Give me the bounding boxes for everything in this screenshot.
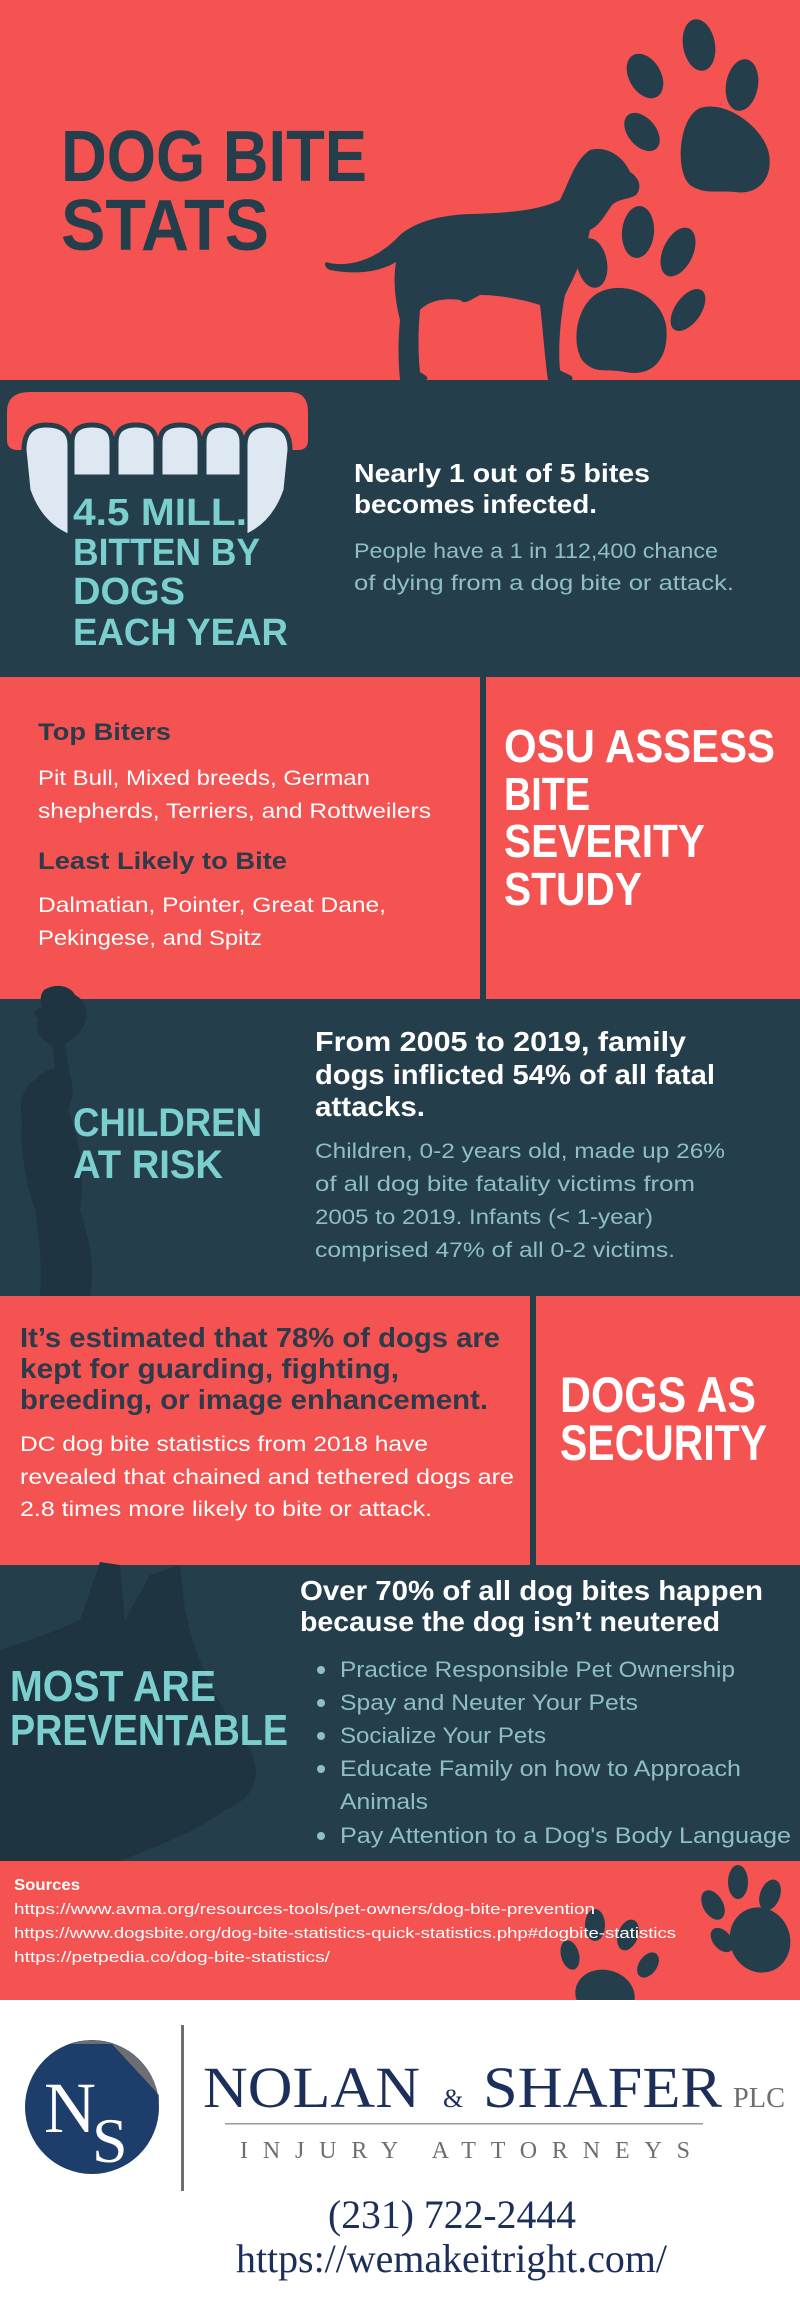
panel: children at risk	[0, 986, 800, 1296]
list: prevention tips: Socialize Your Pets	[340, 1723, 546, 1748]
list: prevention tips: Educate Family on how to Approach	[340, 1756, 741, 1781]
text: least likely: Pekingese, and Spitz	[38, 927, 262, 950]
text: sources: https://petpedia.co/dog-bite-statistics/	[14, 1949, 331, 1966]
list: prevention tips: Pay Attention to a Dog's Body Language	[340, 1823, 791, 1848]
icon: teeth	[7, 392, 308, 537]
text: guarding stat: 2.8 times more likely to bite or attack.	[20, 1498, 432, 1521]
text: firm name	[203, 2055, 785, 2120]
panel: dogs as security	[0, 1296, 800, 1565]
icon: dog silhouette	[325, 149, 639, 380]
text: infection stat: Nearly 1 out of 5 bites	[354, 458, 650, 488]
title: DOG BITE	[61, 117, 367, 197]
heading: OSU study: BITE	[504, 768, 590, 820]
text: infection stat: People have a 1 in 112,400 chance	[354, 540, 718, 563]
panel: most are preventable	[0, 1562, 800, 1861]
footer: contact	[236, 2192, 668, 2281]
text: sources: https://www.dogsbite.org/dog-bite-statistics-quick-statistics.php#dogbite-statistics	[14, 1925, 676, 1942]
text: top biters	[38, 719, 431, 823]
text: family dogs stat: dogs inflicted 54% of all fatal	[315, 1059, 715, 1090]
footer: contact: https://wemakeitright.com/	[236, 2236, 668, 2281]
text: family dogs stat: comprised 47% of all 0-2 victims.	[315, 1239, 675, 1262]
icon: NS logo: N	[44, 2068, 96, 2148]
text: neutered stat: because the dog isn’t neutered	[300, 1606, 720, 1637]
headline: 4.5 mill: BITTEN BY	[73, 532, 260, 574]
text: top biters: shepherds, Terriers, and Rottweilers	[38, 800, 431, 823]
text: firm name: PLC	[733, 2083, 785, 2114]
headline: 4.5 mill: DOGS	[73, 571, 185, 613]
text: family dogs stat: Children, 0-2 years old, made up 26%	[315, 1140, 725, 1163]
icon: paw bottom	[573, 205, 712, 373]
icon: paw top	[617, 17, 770, 192]
heading: most are preventable: PREVENTABLE	[10, 1706, 288, 1755]
text: top biters: Top Biters	[38, 719, 171, 746]
icon: NS logo: S	[92, 2105, 128, 2176]
headline: 4.5 mill	[73, 492, 288, 654]
text: firm name: SHAFER	[483, 2055, 722, 2120]
text: neutered stat	[300, 1575, 763, 1637]
icon: dog head silhouette	[0, 1562, 256, 1861]
footer: contact: (231) 722-2444	[328, 2192, 576, 2237]
heading: most are preventable	[10, 1662, 288, 1755]
icon: NS logo	[25, 2040, 159, 2176]
headline: 4.5 mill: EACH YEAR	[73, 612, 288, 654]
heading: OSU study: OSU ASSESS	[504, 720, 775, 772]
text: least likely: Dalmatian, Pointer, Great Dane,	[38, 894, 386, 917]
title: STATS	[61, 186, 269, 266]
text: infection stat: of dying from a dog bite or attack.	[354, 572, 734, 595]
heading: children at risk: AT RISK	[73, 1143, 223, 1187]
header panel	[0, 0, 800, 380]
heading: OSU study: SEVERITY	[504, 815, 705, 867]
headline: 4.5 mill: 4.5 MILL.	[73, 492, 247, 534]
text: family dogs stat: of all dog bite fatality victims from	[315, 1173, 695, 1196]
heading: dogs as security: DOGS AS	[560, 1367, 756, 1423]
text: family dogs stat	[315, 1026, 725, 1262]
list: prevention tips: Animals	[340, 1789, 428, 1814]
title	[61, 117, 367, 266]
icon: paws small	[557, 1865, 799, 2027]
panel: sources	[0, 1861, 800, 2027]
text: guarding stat	[20, 1322, 514, 1521]
text: firm name: NOLAN	[203, 2055, 420, 2120]
text: guarding stat: revealed that chained and tethered dogs are	[20, 1466, 514, 1489]
text: neutered stat: Over 70% of all dog bites happen	[300, 1575, 763, 1606]
heading: dogs as security	[560, 1367, 767, 1471]
text: firm name: &	[443, 2084, 463, 2113]
text: sources: https://www.avma.org/resources-tools/pet-owners/dog-bite-prevention	[14, 1901, 595, 1918]
text: family dogs stat: From 2005 to 2019, family	[315, 1026, 686, 1057]
text: guarding stat: It’s estimated that 78% of dogs are	[20, 1322, 500, 1353]
text: guarding stat: kept for guarding, fighting,	[20, 1353, 399, 1384]
text: least likely	[38, 848, 386, 950]
icon: mother and child silhouette	[21, 986, 92, 1296]
text: guarding stat: breeding, or image enhancement.	[20, 1384, 488, 1415]
heading: children at risk	[73, 1101, 262, 1187]
text: sources	[14, 1877, 676, 1966]
text: infection stat: becomes infected.	[354, 489, 597, 519]
text: infection stat	[354, 458, 734, 595]
list: prevention tips: Spay and Neuter Your Pets	[340, 1690, 638, 1715]
text: injury attorneys: INJURY ATTORNEYS	[240, 2138, 690, 2164]
panel: biters	[0, 677, 800, 999]
text: least likely: Least Likely to Bite	[38, 848, 287, 875]
panel: bitten stats	[0, 380, 800, 677]
heading: most are preventable: MOST ARE	[10, 1662, 216, 1711]
text: family dogs stat: attacks.	[315, 1091, 425, 1122]
list: prevention tips: Practice Responsible Pet Ownership	[340, 1657, 735, 1682]
text: guarding stat: DC dog bite statistics from 2018 have	[20, 1433, 428, 1456]
heading: OSU study: STUDY	[504, 863, 642, 915]
list: prevention tips	[317, 1657, 791, 1848]
heading: children at risk: CHILDREN	[73, 1101, 262, 1145]
text: sources: Sources	[14, 1877, 80, 1894]
heading: OSU study	[504, 720, 775, 915]
footer: law firm logo	[25, 2025, 785, 2191]
text: top biters: Pit Bull, Mixed breeds, German	[38, 767, 370, 790]
text: family dogs stat: 2005 to 2019. Infants (< 1-year)	[315, 1206, 653, 1229]
